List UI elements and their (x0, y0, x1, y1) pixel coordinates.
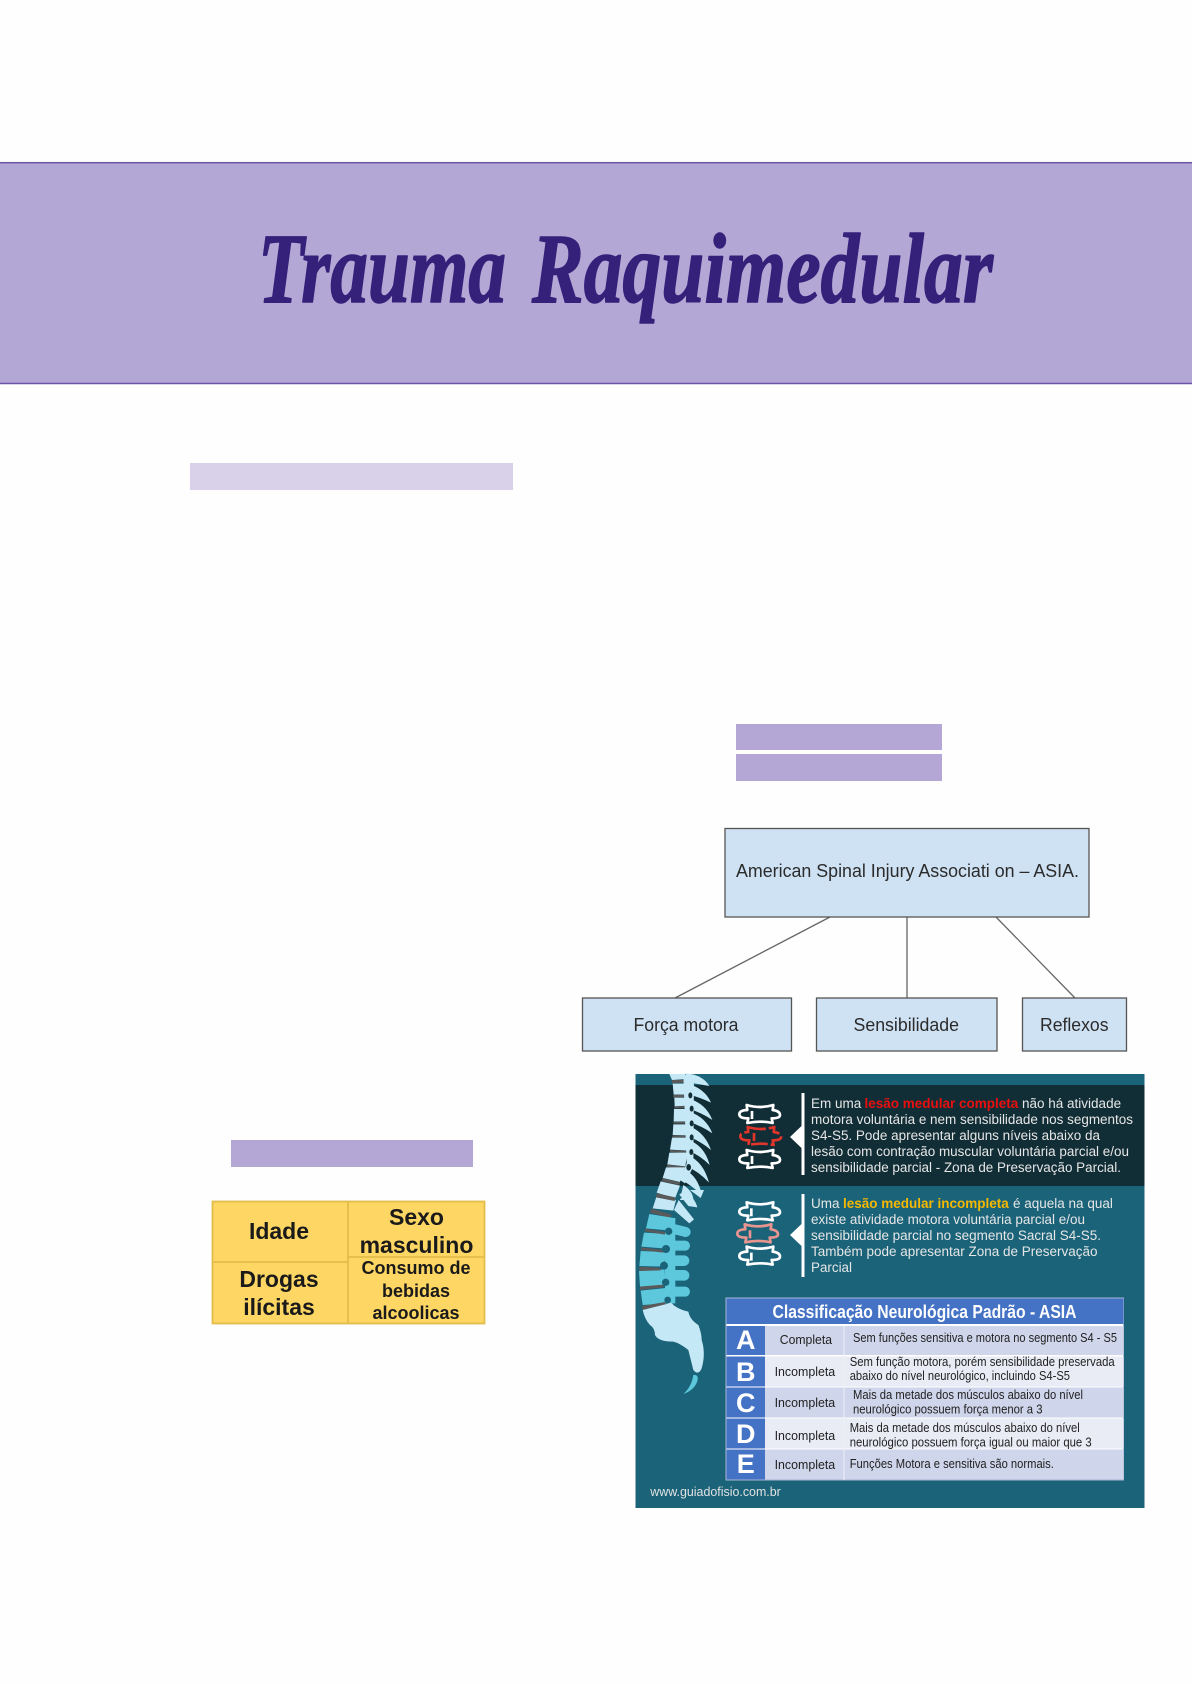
row C (726, 1388, 1124, 1418)
text: incomplete lesion: Também pode apresentar Zona de Preservação (811, 1244, 1098, 1259)
row B (726, 1355, 1124, 1387)
row A (726, 1325, 1124, 1355)
cell: Sexo masculino: Sexo (389, 1204, 444, 1230)
box: Reflexos: Reflexos (1040, 1015, 1108, 1035)
text: complete lesion: lesão medular completa (864, 1096, 1019, 1111)
icon: spine (639, 1073, 712, 1394)
row B: Incompleta (775, 1364, 836, 1379)
icon: pointer and bar, incomplete lesion (790, 1194, 804, 1277)
text: complete lesion: motora voluntária e nem sensibilidade nos segmentos (811, 1112, 1133, 1127)
cell: Sexo masculino: masculino (360, 1232, 473, 1258)
row A: Completa (780, 1332, 833, 1347)
row B: B (736, 1357, 755, 1387)
dark band: complete lesion (636, 1085, 1144, 1186)
text: complete lesion: lesão com contração muscular voluntária parcial e/ou (811, 1144, 1129, 1159)
text: complete lesion: não há atividade (1022, 1096, 1121, 1111)
text: incomplete lesion (811, 1196, 1113, 1275)
text: incomplete lesion: Parcial (811, 1260, 852, 1275)
title: Trauma (258, 213, 506, 324)
row E (726, 1449, 1124, 1480)
cell: Consumo de bebidas alcoolicas: alcoolicas (372, 1303, 460, 1323)
table: ASIA neurological classification (726, 1298, 1124, 1480)
box: American Spinal Injury Association (725, 828, 1089, 917)
row B: Sem função motora, porém sensibilidade preservada (850, 1355, 1115, 1369)
empty heading highlight: top left (190, 463, 513, 490)
row C: neurológico possuem força menor a 3 (853, 1402, 1043, 1416)
icon: pointer and bar, complete lesion (790, 1093, 804, 1175)
text: incomplete lesion: é aquela na qual (1013, 1196, 1113, 1211)
panel: lesion types and ASIA classification (636, 1073, 1144, 1508)
connector lines (675, 917, 1075, 998)
cell: Consumo de bebidas alcoolicas: Consumo de (361, 1258, 471, 1278)
cell: Consumo de bebidas alcoolicas: bebidas (382, 1281, 450, 1301)
text: incomplete lesion: sensibilidade parcial no segmento Sacral S4-S5. (811, 1228, 1101, 1243)
text: incomplete lesion: lesão medular incompleta (843, 1196, 1009, 1211)
title (258, 213, 994, 324)
empty heading highlight: right, second line (736, 754, 942, 781)
row B: abaixo do nível neurológico, incluindo S4-S5 (850, 1369, 1070, 1383)
text: incomplete lesion: Uma (811, 1196, 840, 1211)
flowchart: ASIA assessment (582, 828, 1126, 1051)
box: Reflexos (1022, 998, 1126, 1051)
row E: Funções Motora e sensitiva são normais. (850, 1457, 1054, 1471)
row C: C (736, 1388, 755, 1418)
row A: Sem funções sensitiva e motora no segmento S4 - S5 (853, 1331, 1117, 1345)
text: complete lesion: Em uma (811, 1096, 862, 1111)
box: Sensibilidade (816, 998, 997, 1051)
row D: Incompleta (775, 1428, 836, 1443)
upper spine (656, 1073, 712, 1200)
source credit: www.guiadofisio.com.br (649, 1484, 781, 1499)
text: incomplete lesion: existe atividade motora voluntária parcial e/ou (811, 1212, 1085, 1227)
row D: neurológico possuem força igual ou maior que 3 (850, 1436, 1092, 1450)
empty heading highlight: risk factors (231, 1140, 473, 1167)
row E: E (737, 1449, 755, 1479)
title: Raquimedular (531, 213, 994, 324)
lower spine (639, 1190, 704, 1310)
table header (726, 1298, 1124, 1324)
box: Força motora: Força motora (634, 1015, 739, 1035)
table header: Classificação Neurológica Padrão - ASIA (772, 1302, 1076, 1322)
row E: Incompleta (775, 1457, 836, 1472)
cell: Drogas ilícitas: ilícitas (243, 1294, 315, 1320)
risk factor grid (212, 1201, 485, 1324)
box: Força motora (582, 998, 792, 1051)
cell: Drogas ilícitas: Drogas (239, 1266, 319, 1292)
empty heading highlight: right, first line (736, 724, 942, 750)
text: complete lesion: S4-S5. Pode apresentar alguns níveis abaixo da (811, 1128, 1100, 1143)
sacrum and coccyx (643, 1303, 704, 1394)
icon: vertebrae with complete lesion (739, 1105, 781, 1168)
row C: Incompleta (775, 1395, 836, 1410)
row C: Mais da metade dos músculos abaixo do nível (853, 1388, 1083, 1402)
row A: A (736, 1325, 755, 1355)
box: American Spinal Injury Association: American Spinal Injury Associati on – ASIA. (736, 861, 1079, 881)
box: Sensibilidade: Sensibilidade (854, 1015, 959, 1035)
cell: Idade: Idade (249, 1218, 309, 1244)
text: complete lesion: sensibilidade parcial - Zona de Preservação Parcial. (811, 1160, 1121, 1175)
row D (726, 1418, 1124, 1450)
title banner (0, 163, 1192, 384)
row D: D (736, 1419, 755, 1449)
row D: Mais da metade dos músculos abaixo do nível (850, 1421, 1080, 1435)
icon: vertebrae with incomplete lesion (737, 1202, 780, 1265)
text: complete lesion (811, 1096, 1133, 1175)
